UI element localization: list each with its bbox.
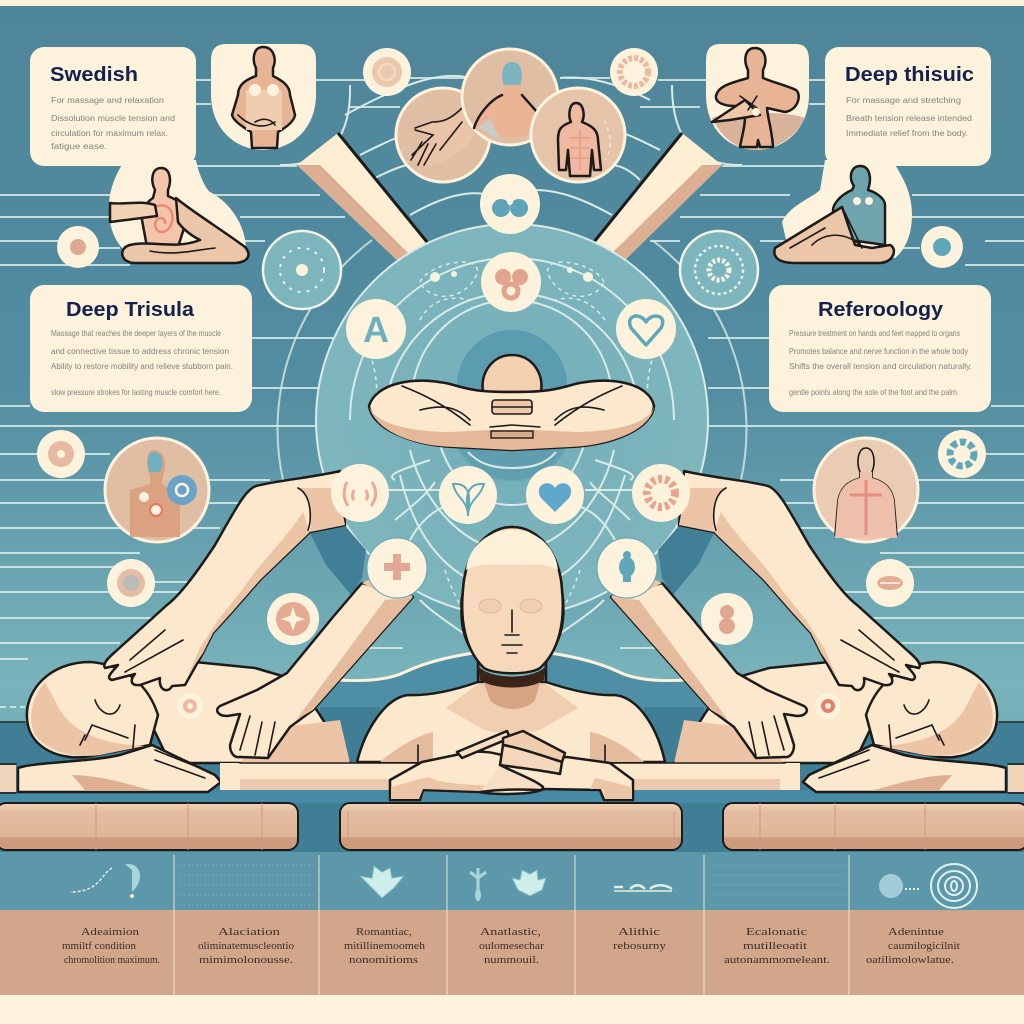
badge: figure eight [701,593,753,645]
central clasped hands [390,731,633,800]
small badge: tan dot [57,226,99,268]
patient shoulder spot left [177,693,203,719]
small badge: teal dot [921,226,963,268]
footer tan band: Adeaimion [81,927,140,938]
footer tan band: rebosurny [613,941,667,952]
footer icon: lotus [360,866,404,898]
footer tan band: oatilimolowlatue. [866,955,954,966]
badge: leaves [439,466,497,524]
footer tan band: mimimolonousse. [199,955,293,966]
arm badge: cross [367,538,427,598]
card: Swedish: For massage and relaxation [51,95,164,105]
card: Reflexology: Promotes balance and nerve function in the whole body [789,346,969,356]
card: Deep Trisula: and connective tissue to address chronic tension [51,346,229,356]
footer tan band: oliminatemuscleontio [198,941,294,952]
arm badge: person [597,538,657,598]
under-arm dark wedges [310,526,714,596]
card: Reflexology: Pressure treatment on hands and feet mapped to organs [789,328,960,338]
arm badge: parentheses [331,464,389,522]
footer teal band [0,852,1024,910]
footer tan band: oulomesechar [479,941,545,952]
small badge: coral [610,48,658,96]
footer icon: sprout [470,868,486,901]
card: Deep Trisula [30,285,252,412]
left badge: ring [107,559,155,607]
cushion right [723,803,1024,850]
card: Reflexology: Referoology [818,299,944,321]
central band arms [0,763,1024,793]
figure bubble: arms crossed [706,44,809,150]
card: Deep thisuic: For massage and stretching [846,95,961,105]
circle: open hand [396,88,490,182]
footer tan band: Alithic [618,927,660,938]
circle: back with blue head [462,49,558,145]
table band [0,652,1024,853]
therapist arm lower left [217,572,413,758]
therapist arm upper left [104,471,345,690]
arm badge: coral [632,464,690,522]
footer tan band: nummouil. [484,955,539,966]
connector curves [280,76,742,215]
footer tan band: caumilogicilnit [888,941,960,952]
cushion centre [340,803,682,850]
cushion left [0,803,298,850]
diagonal beam right [594,133,722,263]
card: Swedish: Dissolution muscle tension and [51,113,175,123]
footer tan band: autonammomeleant. [724,955,830,966]
figure bubble: standing with hands on belly [211,44,316,150]
badge: heart [616,299,676,359]
footer icon: second lotus [512,870,546,896]
card: Swedish: circulation for maximum relax. [51,128,168,138]
card: Deep Trisula: Deep Trisula [66,299,195,321]
figure bubble: seated blue [774,160,912,263]
footer tan band: mutilleoatit [743,941,807,952]
patient lying right [611,471,1006,792]
badge: pink trefoil [481,252,541,312]
dial badge: right [680,231,758,309]
card: Deep thisuic: Immediate relief from the body. [846,128,968,138]
card: Reflexology: Shifts the overall tension and circulation naturally. [789,361,972,371]
card: Deep Trisula: Massage that reaches the deeper layers of the muscle [51,328,221,338]
card: Reflexology [769,285,991,412]
card: Swedish: Swedish [50,64,138,86]
footer tan band: Anatlastic, [480,927,541,938]
badge: four point [267,593,319,645]
footer tan band: nonomitioms [349,955,418,966]
footer icon: wave [614,885,672,891]
patient lying left [18,662,350,792]
dial badge: left [263,231,341,309]
badge: letter A: A [363,309,389,350]
card: Reflexology: gentle points along the sole of the foot and the palm [789,387,957,397]
footer tan band [0,910,1024,995]
right badge: oval [866,559,914,607]
footer tan band: chromolition maximum. [64,955,160,966]
central figure arms and head [369,355,654,450]
footer icon: ball and spiral [879,864,977,908]
central figure [357,527,665,762]
card: Swedish: fatigue ease. [51,141,107,151]
card: Deep thisuic: Breath tension release intended [846,113,972,123]
footer tan band: Adenintue [888,927,944,938]
card: Deep Trisula: Ability to restore mobility and relieve stubborn pain. [51,361,233,371]
card: Swedish [30,47,196,166]
card: Deep thisuic: Deep thisuic [845,64,974,86]
footer tan band: mitillinemoomeh [344,941,426,952]
footer icon: dotted arc [70,864,140,898]
footer tan band: Ecalonatic [746,927,807,938]
circle: standing back [531,88,625,182]
badge: solid heart [526,466,584,524]
badge: letter A [346,299,406,359]
footer tan band: Alaciation [218,927,281,938]
left mid badge: swirl [37,430,85,478]
outer rings [278,240,746,480]
right circle: torso [814,438,918,542]
central dial [316,224,708,640]
diagonal beam left [297,133,427,263]
left circle: torso with blue head [105,438,209,542]
right badge: teal flower [938,430,986,478]
horizontal stripes [0,78,1024,707]
patient shoulder spot right [815,693,841,719]
small badge: spiral [363,48,411,96]
footer tan band: Romantiac, [356,927,412,938]
figure bubble: seated massage [109,160,248,263]
card: Deep thisuic [825,47,991,166]
badge: two blue circles [480,174,540,234]
footer tan band: mmiltf condition [62,941,137,952]
card: Deep Trisula: slow pressure strokes for lasting muscle comfort here. [51,387,221,397]
